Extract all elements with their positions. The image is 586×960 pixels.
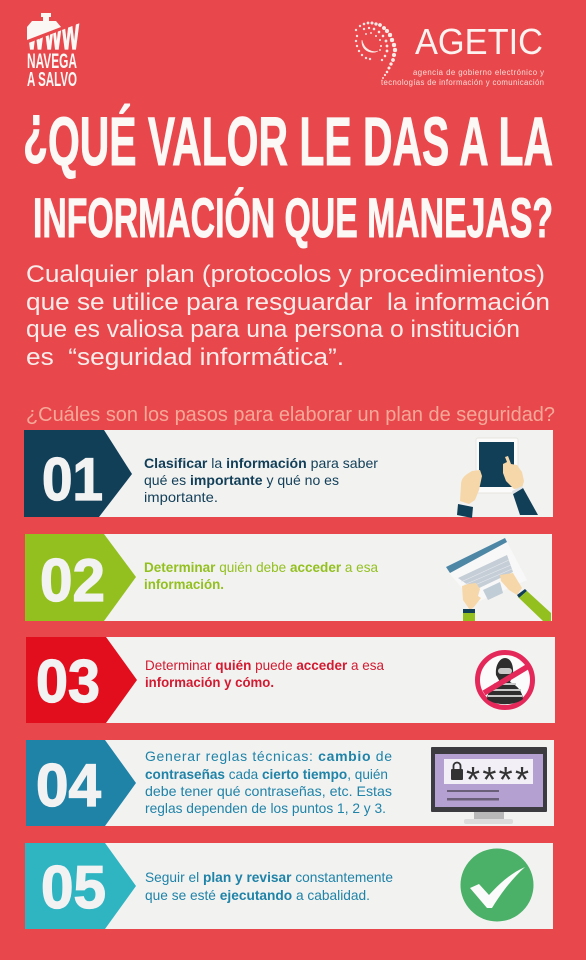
logo: Navega a Salvo: WWW: [27, 16, 79, 57]
number badge 05: 05: [41, 854, 106, 921]
subheading: ¿Cuáles son los pasos para elaborar un plan de seguridad?: [26, 404, 555, 426]
text: step 01: importante.: [144, 489, 218, 505]
text: step 01: [144, 455, 378, 505]
text: step 03: Determinar quién puede acceder a esa: [145, 657, 384, 673]
panel: step 03: [26, 637, 555, 723]
text: step 02: Determinar quién debe acceder a esa: [144, 559, 378, 575]
title: [23, 90, 553, 249]
text: step 01: Clasificar la información para saber: [144, 455, 378, 471]
logo: AGETIC: agencia de gobierno electrónico y: [413, 68, 544, 77]
intro text block: es “seguridad informática”.: [26, 344, 344, 371]
icon: password monitor: [431, 747, 547, 824]
text: step 03: información y cómo.: [145, 674, 274, 690]
icon: password monitor: ****: [466, 759, 529, 800]
number badge 02: 02: [40, 547, 105, 614]
text: step 05: Seguir el plan y revisar constantemente: [145, 869, 393, 885]
number badge 03: 03: [36, 648, 100, 715]
intro text block: Cualquier plan (protocolos y procedimientos): [26, 261, 545, 288]
icon: green check: [460, 848, 534, 922]
logo: AGETIC: AGETIC: [415, 21, 543, 62]
logo: AGETIC: [355, 21, 544, 87]
number badge 02: [25, 534, 136, 621]
logo: Navega a Salvo: A SALVO: [27, 69, 77, 91]
title: ¿: [23, 90, 48, 167]
intro text block: que se utilice para resguardar la información: [26, 289, 550, 316]
number badge 04: [26, 740, 136, 826]
text: step 04: Generar reglas técnicas: cambio de: [145, 748, 392, 764]
text: step 04: [145, 748, 392, 816]
icon: hands on laptop: [446, 538, 551, 621]
text: step 04: reglas dependen de los puntos 1, 2 y 3.: [145, 800, 386, 816]
intro text block: [26, 261, 550, 371]
panel: step 02: [25, 534, 552, 621]
icon: hands on tablet: [457, 438, 538, 518]
text: step 04: contraseñas cada cierto tiempo, quién: [145, 766, 388, 782]
logo: Navega a Salvo: NAVEGA: [27, 50, 77, 73]
text: step 02: información.: [144, 576, 224, 592]
logo: AGETIC: tecnologías de información y comunicación: [381, 78, 544, 87]
panel: step 01: [24, 430, 553, 518]
text: step 04: debe tener qué contraseñas, etc. Estas: [145, 783, 392, 799]
text: step 01: qué es importante y qué no es: [144, 472, 339, 488]
icon: no hacker sign: [478, 652, 532, 708]
intro text block: que es valiosa para una persona o institución: [26, 316, 520, 343]
number badge 04: 04: [36, 752, 102, 819]
text: step 05: que se esté ejecutando a cabalidad.: [145, 887, 370, 903]
text: step 02: [144, 559, 378, 592]
number badge 05: [25, 843, 136, 929]
logo: Navega a Salvo: [27, 13, 79, 91]
panel: step 05: [25, 843, 553, 929]
number badge 01: [24, 430, 132, 517]
panel: step 04: [26, 740, 554, 826]
icon: dotted spiral: [355, 22, 397, 79]
text: step 03: [145, 657, 384, 690]
number badge 01: 01: [42, 446, 103, 513]
text: step 05: [145, 869, 393, 903]
number badge 03: [26, 637, 137, 723]
